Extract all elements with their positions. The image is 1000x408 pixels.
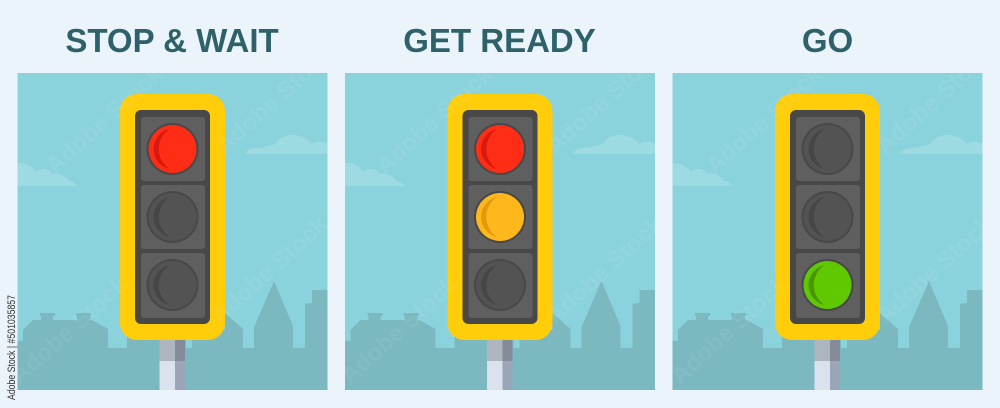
panel: get ready xyxy=(345,22,655,390)
panel: stop and wait xyxy=(18,22,328,390)
watermark text: Adobe Stock xyxy=(871,41,999,159)
scene: sky, clouds and skyline xyxy=(672,73,982,390)
red lamp lit xyxy=(474,123,526,175)
amber lamp off xyxy=(146,191,198,243)
watermark text: Adobe Stock xyxy=(206,211,334,329)
scene: sky, clouds and skyline xyxy=(18,73,328,390)
watermark text: Adobe Stock xyxy=(336,271,464,389)
scene: sky, clouds and skyline xyxy=(345,73,655,390)
traffic light: green lit xyxy=(775,94,880,390)
watermark text: Adobe Stock xyxy=(541,211,669,329)
heading: stop and wait: STOP & WAIT xyxy=(65,22,279,59)
amber lamp lit xyxy=(474,191,526,243)
amber lamp off xyxy=(802,191,854,243)
red lamp lit xyxy=(146,123,198,175)
heading: get ready: GET READY xyxy=(403,22,596,59)
watermark text: Adobe Stock xyxy=(211,41,339,159)
watermark text: Adobe Stock xyxy=(371,61,499,179)
traffic light: red lit xyxy=(120,94,225,390)
green lamp off xyxy=(474,259,526,311)
watermark text: Adobe Stock xyxy=(871,211,999,329)
watermark text: Adobe Stock xyxy=(666,271,794,389)
watermark text: Adobe Stock xyxy=(6,271,134,389)
green lamp off xyxy=(146,259,198,311)
heading: go: GO xyxy=(802,22,853,59)
stock id caption: Adobe Stock | #501035857 xyxy=(6,295,18,400)
watermark text: Adobe Stock xyxy=(701,61,829,179)
panel: go xyxy=(672,22,982,390)
red lamp off xyxy=(802,123,854,175)
green lamp lit xyxy=(802,259,854,311)
traffic light: red and amber lit xyxy=(448,94,552,390)
watermark text: Adobe Stock xyxy=(41,61,169,179)
watermark text: Adobe Stock xyxy=(541,41,669,159)
